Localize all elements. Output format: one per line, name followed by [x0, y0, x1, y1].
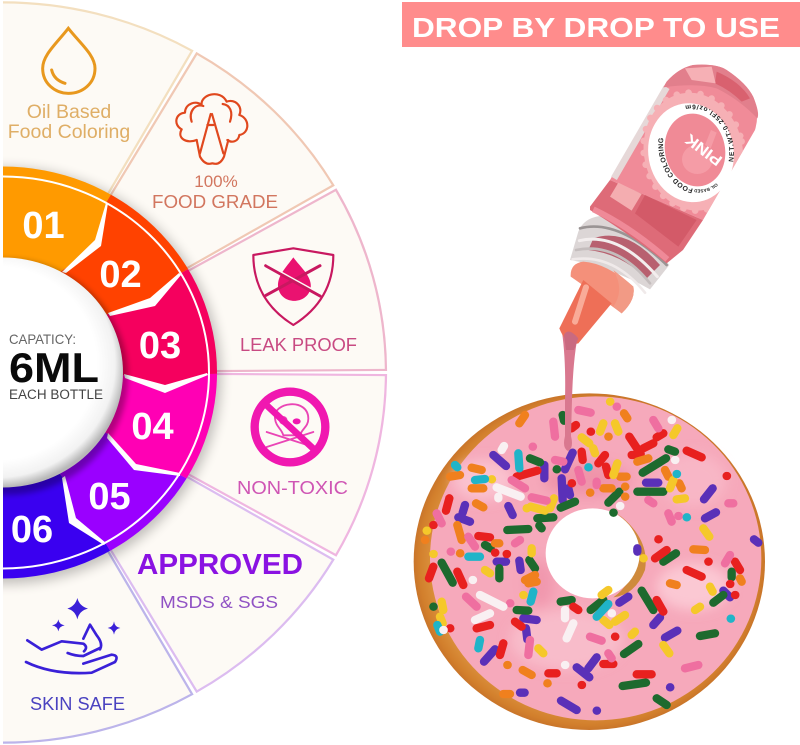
white sprinkles [443, 420, 675, 665]
numbers: 06 [11, 509, 53, 551]
banner text: DROP BY DROP TO USE [412, 12, 780, 43]
label pink center [658, 108, 732, 192]
label: approved: APPROVED [137, 549, 303, 581]
hub shadow [0, 259, 128, 495]
hole brown crescent [613, 511, 646, 597]
shoulder lower rim [593, 209, 667, 259]
green sprinkles [433, 415, 732, 705]
numbers: 01 [22, 205, 65, 247]
bottle left stripe [614, 87, 667, 178]
neck threads [573, 227, 667, 293]
nozzle highlight [575, 287, 586, 322]
icon: no skull [255, 392, 325, 462]
panel: leak proof [183, 190, 386, 371]
nozzle base shade [613, 270, 634, 313]
label curved text: net weight: NET.WT:0.25Fl.oz/6m [686, 104, 734, 162]
bottle top band [663, 65, 758, 118]
icing stream [562, 332, 578, 451]
segment dividers [62, 203, 208, 545]
nozzle base [571, 262, 634, 313]
donut glaze [430, 396, 761, 720]
shoulder right shade [635, 195, 697, 247]
numbers: 02 [99, 254, 142, 296]
glaze highlights [453, 453, 730, 670]
donut crust [414, 393, 765, 730]
cyan sprinkles [437, 453, 731, 648]
panel: approved [108, 474, 333, 692]
label cloud [640, 90, 745, 214]
yellow sprinkles [427, 402, 713, 653]
ring white line [0, 176, 209, 568]
panel: skin safe [0, 546, 192, 743]
strawberry motif [682, 130, 717, 174]
label: 100% food grade: 100% [194, 172, 238, 191]
label: non-toxic: NON-TOXIC [237, 477, 348, 498]
pink sprinkles [437, 407, 733, 668]
label: oil based food coloring: Oil Based [27, 101, 111, 123]
label: leak proof: LEAK PROOF [240, 334, 357, 355]
panel shape: skin safe [0, 546, 192, 743]
label: oil based food coloring: Food Coloring [8, 121, 130, 143]
label pink text: PINK [682, 130, 726, 169]
bottle top dark patch [715, 72, 750, 102]
icon: oil drop [43, 28, 95, 93]
donut hole [546, 508, 640, 598]
panel: oil based [0, 2, 192, 199]
icon: shield with crossed drop [253, 248, 333, 325]
wheel [0, 2, 386, 743]
glass neck [570, 216, 669, 289]
label curved text: food coloring: OIL BASED FOOD COLORING [658, 138, 718, 194]
bottle [559, 64, 758, 350]
capacity value: 6ML [9, 344, 99, 391]
hub disc [0, 258, 123, 488]
each bottle label: EACH BOTTLE [9, 387, 103, 402]
nozzle [559, 280, 612, 344]
center capacity hub [0, 258, 123, 488]
numbers: 05 [88, 476, 131, 518]
panel shape: approved [108, 474, 333, 692]
panel: food grade [108, 53, 333, 271]
label white ring [640, 96, 742, 209]
label: skin safe: SKIN SAFE [30, 694, 125, 714]
shoulder highlight [610, 183, 642, 211]
bottle shoulder [590, 180, 703, 263]
bottle top highlight [685, 67, 716, 83]
purple sprinkles [458, 453, 758, 711]
ring segments [3, 166, 217, 578]
icon: hand with drop and sparkles [26, 598, 120, 673]
red sprinkles [429, 425, 740, 685]
numbers: 04 [131, 406, 174, 448]
numbers [11, 205, 181, 551]
banner background [402, 2, 800, 47]
ring shadow [0, 168, 221, 584]
label: msds and sgs: MSDS & SGS [160, 592, 278, 612]
capacity label: CAPATICY: [9, 331, 76, 347]
banner: drop by drop to use [402, 2, 800, 47]
donut [414, 393, 765, 730]
panel: non-toxic [183, 374, 386, 555]
panel shape: oil based [0, 2, 192, 199]
nozzle tip liquid [564, 332, 578, 350]
neck inner tint [588, 236, 660, 278]
panel shape: food grade [108, 53, 333, 271]
panel shape: leak proof [183, 190, 386, 371]
numbers: 03 [139, 325, 181, 367]
icon: cauliflower [176, 94, 247, 164]
sprinkles [425, 402, 758, 711]
label: 100% food grade: FOOD GRADE [152, 191, 278, 212]
label: 100% food grade [154, 176, 278, 208]
panel shape: non-toxic [183, 374, 386, 555]
bottle body [610, 65, 757, 220]
orange sprinkles [425, 413, 742, 694]
number ring [3, 166, 217, 578]
